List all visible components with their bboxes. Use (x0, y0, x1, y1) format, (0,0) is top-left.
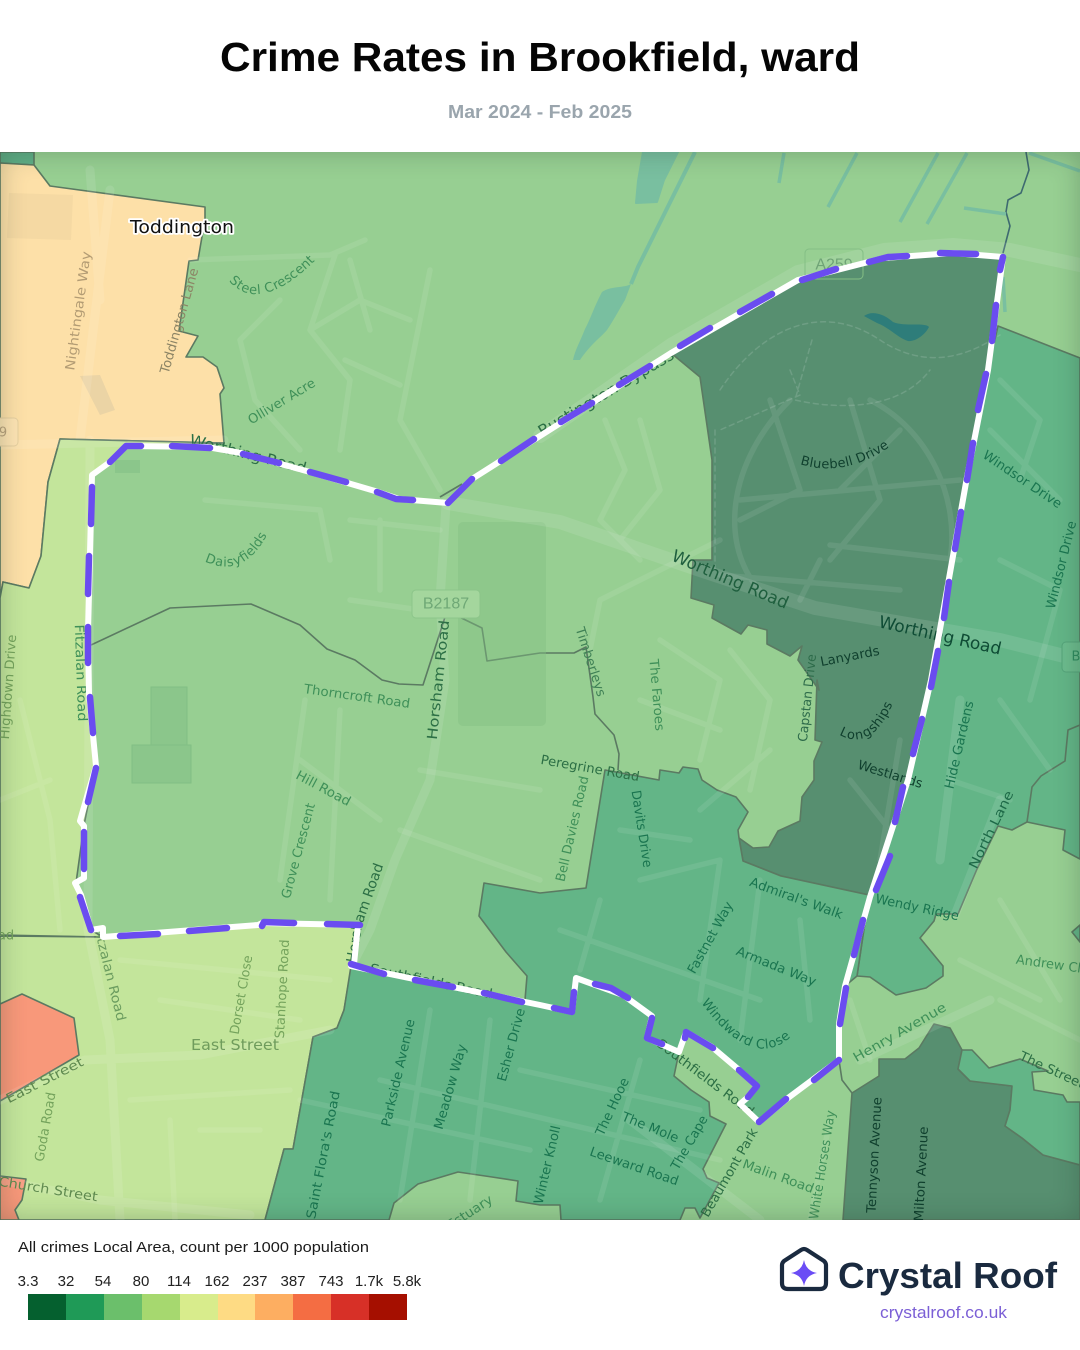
label: The Faroes: The Faroes (645, 657, 667, 732)
area: south-east mid-green (958, 1050, 1080, 1165)
label: Lanyards: Lanyards (819, 644, 881, 670)
label: Henry Avenue: Henry Avenue (851, 1000, 949, 1066)
label: The Cape: The Cape (668, 1113, 711, 1174)
label: Southfields Road west: Southfields Road (368, 962, 494, 1002)
land-use patches (7, 193, 546, 783)
boundary: white base line (75, 253, 1003, 1122)
area: west lime strip (0, 439, 224, 937)
legend tick values: 80 (133, 1273, 149, 1290)
legend title: All crimes Local Area, count per 1000 population (18, 1239, 369, 1256)
label: Admiral's Walk: Admiral's Walk (747, 875, 845, 923)
area: Toddington orange (0, 163, 224, 598)
line: inner ward boundary (91, 604, 619, 770)
label: East Street west: East Street (4, 1055, 86, 1107)
water: long pond (573, 284, 631, 360)
logo wordmark: Crystal Roof (838, 1255, 1058, 1296)
label: Rustington Bypass: Rustington Bypass (535, 346, 678, 440)
badge: A259 road number (805, 249, 863, 279)
label: Worthing Road centre: Worthing Road (669, 546, 791, 614)
badge: truncated road number east (1062, 642, 1080, 672)
header: title and date range (220, 34, 860, 122)
label: Stanhope Road: Stanhope Road (273, 939, 293, 1039)
patch: Toddington green (80, 375, 115, 415)
label: Worthing Road east: Worthing Road (877, 613, 1003, 659)
badge: B2187 road number: B2187 (423, 596, 469, 612)
badge: A259 road number: A259 (815, 256, 853, 274)
water: dark pond (864, 313, 929, 341)
street labels (0, 250, 1080, 1272)
footer: legend and branding (18, 1239, 1058, 1322)
label: Church Street: Church Street (0, 1175, 99, 1205)
label: Windsor Drive east: Windsor Drive (1044, 520, 1080, 610)
legend tick values: 32 (58, 1273, 74, 1290)
base area: low crime light green (0, 152, 1080, 1220)
area: south mid-green Parkside (265, 966, 726, 1220)
label: Thorncroft Road: Thorncroft Road (302, 682, 411, 712)
label: Westlands: Westlands (856, 758, 924, 792)
label: Meadow Way: Meadow Way (432, 1042, 470, 1131)
label: Olliver Acre: Olliver Acre (246, 376, 318, 428)
line: south-west ward boundary (0, 935, 103, 937)
water: canal (631, 152, 695, 284)
label: Fitzalan Road lower: Fitzalan Road (90, 925, 128, 1023)
line: boundary stub at Worthing Road junction (440, 484, 462, 497)
label: Peregrine Road: Peregrine Road (539, 753, 641, 785)
area: dark low-crime Bluebell (671, 253, 1003, 895)
badge: B2187 road number (412, 590, 480, 618)
label: Horsham Road upper: Horsham Road (425, 619, 453, 741)
label: Horsham Road lower: Horsham Road (346, 862, 383, 961)
label: Capstan Drive: Capstan Drive (796, 653, 820, 743)
label: Malin Road: Malin Road (740, 1157, 816, 1197)
line: inner east boundary (1027, 725, 1080, 822)
label: Goda Road: Goda Road (33, 1091, 59, 1163)
line: far north-east boundary (1003, 152, 1029, 253)
label: Worthing Road west: Worthing Road (188, 431, 308, 477)
label: Fitzalan Road upper: Fitzalan Road (71, 624, 89, 722)
area: south central mid-green Admiral's Walk (479, 767, 869, 1122)
legend tick values: 5.8k (393, 1273, 422, 1290)
legend tick values: 162 (204, 1273, 230, 1290)
label: Hill Road: Hill Road (293, 768, 353, 810)
patch: sports field upper (151, 687, 187, 745)
label: Fastnet Way: Fastnet Way (685, 899, 737, 977)
legend tick values: 387 (280, 1273, 306, 1290)
roads: major (448, 245, 1080, 660)
patch: allotments (458, 522, 546, 726)
area: East Street lime (0, 923, 358, 1220)
label: Windsor Drive north: Windsor Drive (980, 448, 1064, 512)
panel: choropleth map (0, 152, 1080, 1220)
area: top-left corner strip (0, 152, 34, 165)
map edge vignette (0, 152, 1080, 1220)
paths: dashed footpaths in park (715, 322, 1000, 570)
label: Parkside Avenue: Parkside Avenue (379, 1018, 419, 1128)
place label: Toddington: Toddington (129, 218, 234, 238)
label: Dorset Close: Dorset Close (228, 954, 256, 1036)
badge: truncated road number west (0, 418, 18, 446)
area: small far-east mid-green (1072, 925, 1080, 942)
water: upper pond (636, 152, 678, 203)
label: Bell Davies Road: Bell Davies Road (554, 775, 592, 883)
legend tick values: 743 (318, 1273, 344, 1290)
date range subtitle: Mar 2024 - Feb 2025 (448, 101, 632, 122)
roads: estates (0, 240, 1080, 1220)
label: The Hooe: The Hooe (593, 1076, 633, 1139)
boundary: purple dashes (80, 253, 1003, 1122)
legend tick values: 1.7k (355, 1273, 384, 1290)
label: Davits Drive: Davits Drive (627, 789, 655, 869)
road network (0, 170, 1080, 1220)
label: Milton Avenue: Milton Avenue (912, 1126, 932, 1220)
label: Nightingale Way: Nightingale Way (63, 250, 95, 371)
label: Timberleys: Timberleys (571, 624, 608, 699)
label: Leeward Road: Leeward Road (588, 1145, 680, 1189)
legend tick values (18, 1273, 422, 1290)
label: Saint Flora's Road: Saint Flora's Road (304, 1090, 344, 1220)
label: Longships: Longships (840, 702, 892, 740)
website link text: crystalroof.co.uk (880, 1304, 1008, 1322)
legend tick values: 237 (242, 1273, 268, 1290)
label: Esher Drive: Esher Drive (495, 1007, 529, 1083)
label: Daisyfields: Daisyfields (206, 532, 266, 568)
label: White Horses Way: White Horses Way (807, 1109, 839, 1220)
label: Winter Knoll: Winter Knoll (532, 1124, 564, 1206)
label: Steel Crescent: Steel Crescent (230, 256, 315, 294)
area: east mid-green Windsor (857, 326, 1080, 995)
line: south-east junction boundary (839, 1060, 852, 1093)
label: East Street centre: East Street (191, 1036, 279, 1054)
label: Wendy Ridge: Wendy Ridge (874, 892, 960, 924)
label: Southfields Road east: Southfields Road (653, 1037, 757, 1119)
label: Toddington Lane: Toddington Lane (157, 267, 202, 376)
area: salmon lower block (0, 1176, 26, 1220)
label: North Lane: North Lane (967, 789, 1017, 871)
ward boundary: white line with purple dashes (75, 253, 1003, 1122)
patch: small block near Worthing Road (115, 460, 140, 473)
patch: sports field lower (132, 745, 191, 783)
legend colour scale (28, 1294, 407, 1320)
title: Crime Rates in Brookfield, ward (220, 34, 860, 80)
label: Hide Gardens: Hide Gardens (943, 699, 977, 791)
patch: Toddington car park (7, 193, 73, 240)
water: drainage ditches (779, 153, 1080, 312)
label: Tennyson Avenue: Tennyson Avenue (864, 1097, 886, 1214)
choropleth areas (0, 152, 1080, 1220)
legend tick values: 114 (167, 1273, 191, 1290)
label: Windward Close: Windward Close (703, 997, 790, 1049)
legend tick values: 54 (95, 1273, 111, 1290)
area: south-east dark Tennyson (843, 1024, 1080, 1220)
logo icon: house with star (782, 1249, 826, 1289)
roads: secondary (0, 170, 1000, 1220)
label: Beaumont Park: Beaumont Park (699, 1126, 762, 1220)
area: salmon high-crime block (0, 994, 79, 1101)
label: The Mole: The Mole (618, 1109, 681, 1146)
label: Armada Way: Armada Way (734, 944, 819, 990)
label: Grove Crescent: Grove Crescent (279, 802, 319, 900)
legend tick values: 3.3 (18, 1273, 38, 1290)
label: Bluebell Drive: Bluebell Drive (801, 442, 888, 468)
water features (573, 152, 1080, 360)
